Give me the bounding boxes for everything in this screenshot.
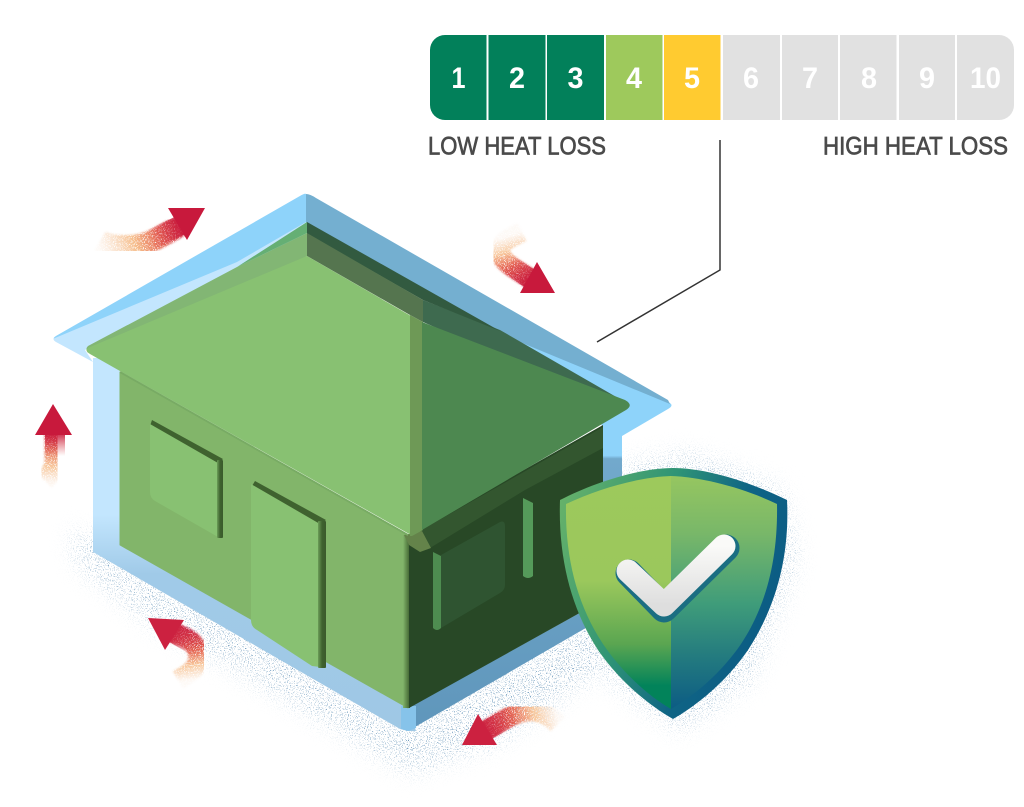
door top edge bbox=[252, 481, 326, 525]
scale cell 2 bbox=[488, 35, 546, 120]
check fill bbox=[628, 546, 724, 605]
scale cell 3: 3 bbox=[568, 62, 584, 95]
arrow head bbox=[520, 262, 555, 293]
arrow tail solid bbox=[45, 432, 65, 456]
shell: right roof band bbox=[306, 194, 670, 404]
shell: left roof bbox=[54, 194, 306, 362]
scale cell 10 bbox=[957, 35, 1014, 120]
scale cell 5: 5 bbox=[684, 62, 700, 95]
door side edge bbox=[318, 521, 326, 668]
roof: right lower band bbox=[423, 300, 628, 410]
window face bbox=[441, 522, 505, 628]
arrow head bbox=[148, 618, 184, 650]
arrow tail bbox=[44, 432, 55, 480]
roof bbox=[86, 222, 630, 536]
house bbox=[54, 194, 672, 731]
shell: right wall bbox=[408, 425, 622, 731]
roof: left face bbox=[86, 256, 411, 535]
arrow head bbox=[35, 404, 72, 435]
scale cell 8 bbox=[840, 35, 896, 120]
arrow: top left bbox=[100, 208, 205, 246]
left wall bbox=[120, 372, 408, 708]
scale cell 1: 1 bbox=[452, 62, 466, 95]
window left bbox=[150, 420, 223, 538]
door face bbox=[251, 484, 320, 667]
scale cell 10: 10 bbox=[970, 62, 1001, 95]
roof: left wall join line bbox=[120, 372, 408, 535]
scale cell 5 bbox=[664, 35, 720, 120]
roof: right dark wedge bbox=[307, 222, 500, 331]
shell: corner bbox=[401, 706, 416, 731]
window top edge bbox=[150, 420, 223, 464]
arrow tail solid bbox=[484, 714, 515, 732]
arrow tail bbox=[484, 711, 558, 732]
arrow tail solid bbox=[172, 632, 196, 646]
shell: right eave bbox=[505, 330, 672, 447]
arrow tail bbox=[500, 232, 532, 280]
scale cell 9 bbox=[899, 35, 955, 120]
roof: right second band bbox=[307, 233, 423, 322]
shield bbox=[560, 468, 787, 719]
roof: hip strip bbox=[410, 315, 423, 536]
scale cell 6: 6 bbox=[743, 62, 759, 95]
door right sliver bbox=[523, 498, 533, 578]
right wall bbox=[409, 425, 603, 708]
insulation shell bbox=[54, 194, 672, 731]
stippled ground shadow bbox=[72, 455, 795, 772]
arrow head bbox=[462, 714, 497, 745]
scale cell 1 bbox=[430, 35, 486, 120]
shield inner right bbox=[671, 476, 777, 709]
arrow tail bbox=[100, 224, 183, 246]
window side edge bbox=[217, 460, 223, 538]
shell: left roof top bbox=[54, 194, 306, 338]
scale cell 9: 9 bbox=[919, 62, 935, 95]
scale cell 7 bbox=[782, 35, 838, 120]
roof: left top band bbox=[237, 222, 307, 267]
shield inner left bbox=[566, 476, 671, 709]
scale cell 6 bbox=[723, 35, 780, 120]
window right bbox=[433, 522, 505, 630]
under-roof corner bbox=[404, 531, 431, 552]
shield outer bbox=[560, 468, 787, 719]
label: low heat loss: LOW HEAT LOSS bbox=[428, 132, 606, 160]
arrow: top right bbox=[500, 232, 555, 293]
check outline bbox=[629, 548, 726, 609]
leader line bbox=[597, 140, 720, 342]
roof: right face bbox=[422, 322, 630, 530]
arrow head bbox=[168, 208, 205, 240]
arrow tail solid bbox=[150, 224, 183, 240]
arrow tail bbox=[172, 632, 198, 680]
scale cell 7: 7 bbox=[802, 62, 818, 95]
scale cell 4: 4 bbox=[626, 62, 642, 95]
under-roof shade on right wall bbox=[412, 427, 603, 548]
scale cell 3 bbox=[547, 35, 604, 120]
rating scale bbox=[430, 35, 1014, 120]
arrow: left bbox=[35, 404, 72, 480]
check mark bbox=[628, 546, 726, 609]
roof: left second band bbox=[86, 233, 307, 370]
scale cell 8: 8 bbox=[861, 62, 877, 95]
door bbox=[251, 481, 326, 668]
scale cell 4 bbox=[606, 35, 662, 120]
shell: left wall bbox=[93, 358, 416, 731]
left wall corner shading bbox=[403, 535, 410, 708]
arrow tail solid bbox=[508, 264, 532, 280]
scale cell 2: 2 bbox=[509, 62, 525, 95]
arrow: bottom bbox=[462, 711, 558, 745]
window highlight bbox=[433, 552, 441, 630]
arrow: bottom left bbox=[148, 618, 198, 680]
window face bbox=[150, 424, 218, 537]
